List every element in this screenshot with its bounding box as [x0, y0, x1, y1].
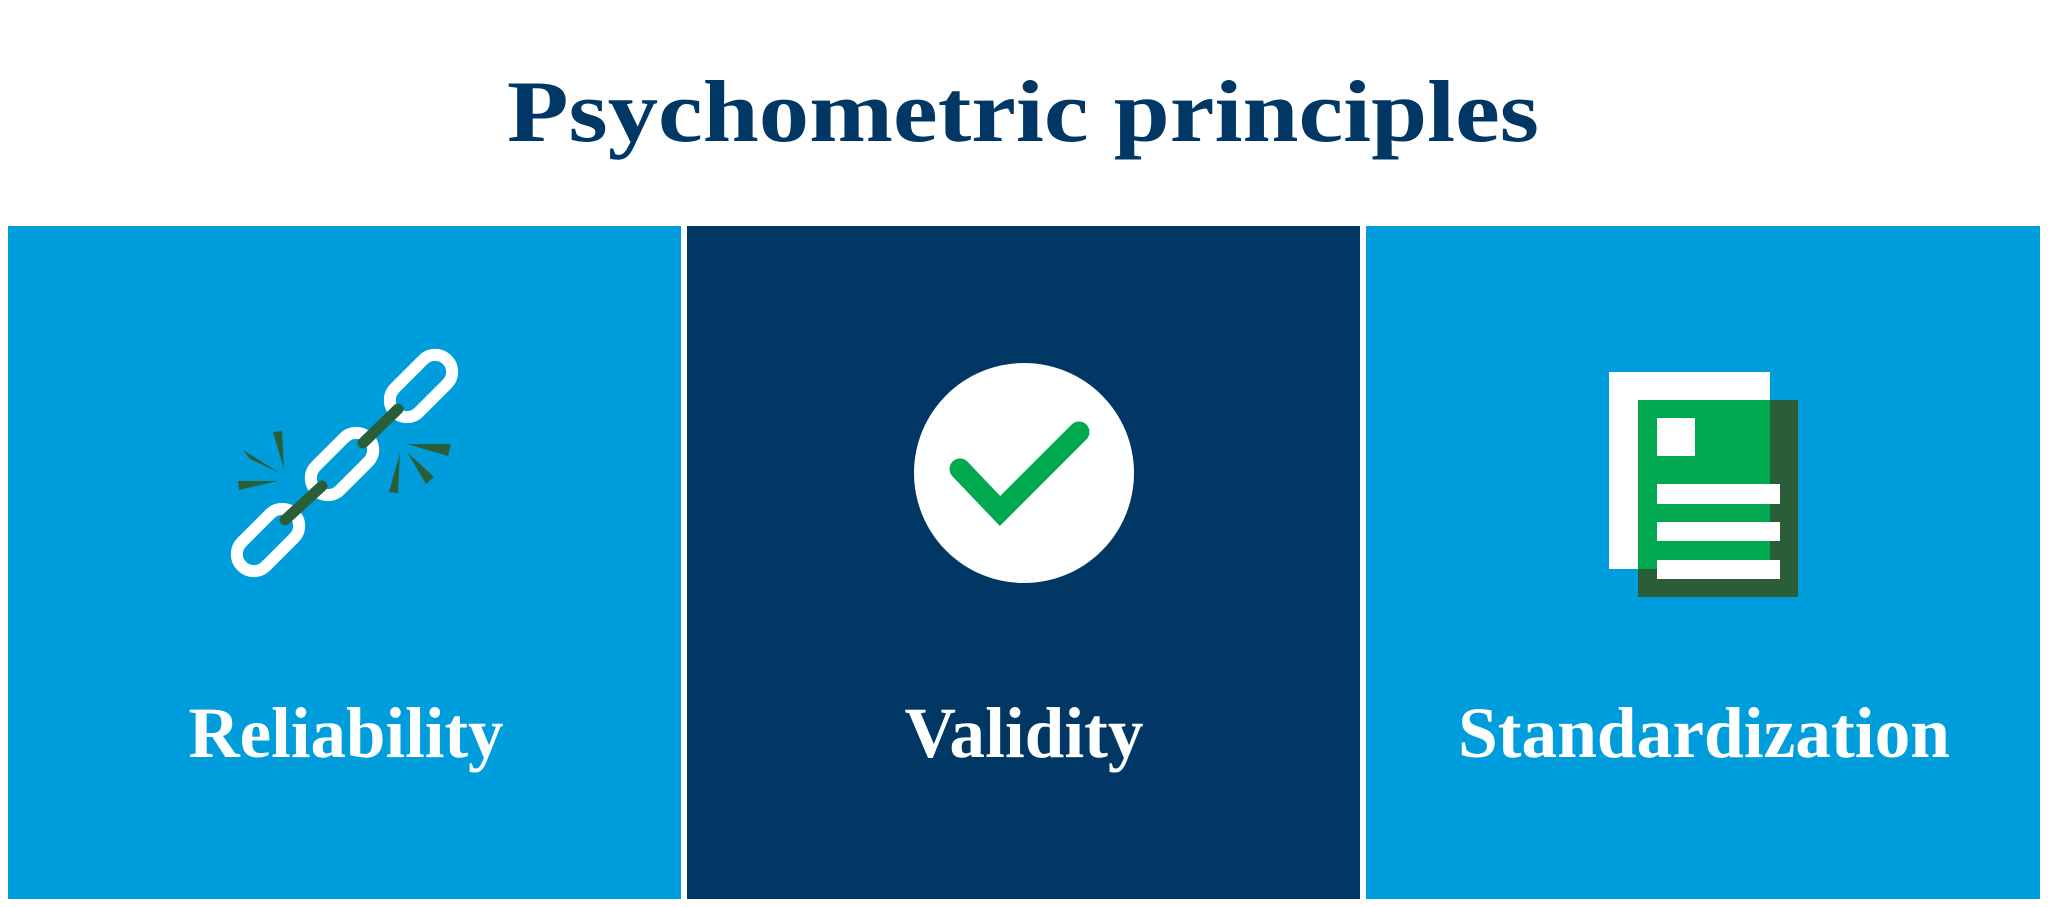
label: standardization: Standardization: [1458, 693, 1950, 773]
title: Psychometric principles: [507, 64, 1539, 161]
icon: broken chain: [230, 348, 459, 578]
icon: checkmark circle: [914, 363, 1134, 583]
label: reliability: Reliability: [188, 693, 504, 773]
icon: documents: [1609, 372, 1798, 597]
panel: reliability: [8, 226, 681, 899]
panel: standardization: [1366, 226, 2040, 899]
label: validity: Validity: [904, 693, 1144, 773]
panel: validity: [687, 226, 1360, 899]
